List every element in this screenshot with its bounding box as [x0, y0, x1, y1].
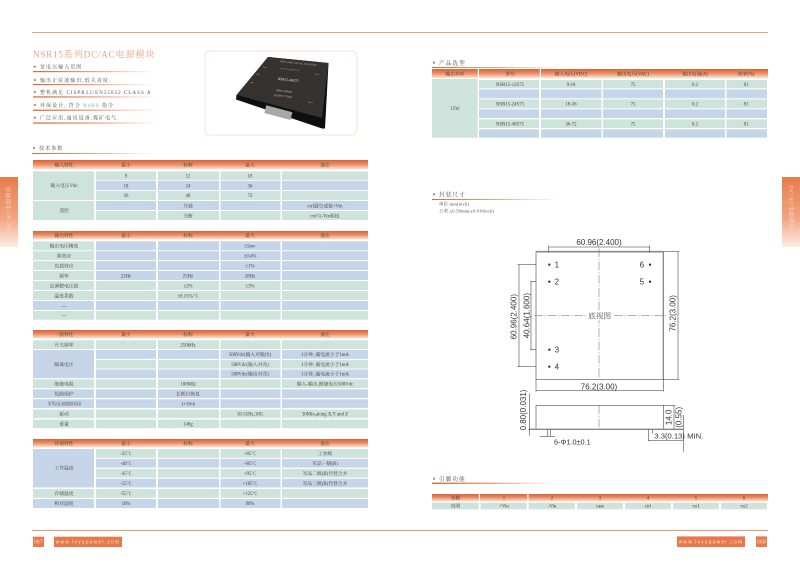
table: input characteristics: 18	[248, 174, 253, 180]
table: environmental characteristics: 军品二级(B)代替合并	[303, 470, 348, 477]
product photo: NSR15-48S75 DC/AC INVERTER	[279, 60, 317, 67]
table: product selection: 15W	[450, 107, 460, 112]
header row: 备注	[320, 232, 330, 239]
footer: left page number	[33, 537, 44, 547]
header row: 标称	[183, 440, 193, 447]
table: general characteristics: 30Min,along X,Y and Z	[302, 413, 348, 418]
footer: left website	[54, 537, 122, 547]
table: general characteristics: 振动	[59, 411, 69, 418]
header row: 最大	[245, 331, 255, 338]
header row: 一般特性	[54, 331, 74, 338]
footer: right page number	[756, 536, 767, 547]
pins: 1	[555, 261, 560, 270]
table: general characteristics: 输入-输出,绝缘电压500Vdc	[297, 380, 353, 388]
table: input characteristics	[33, 160, 368, 220]
pins: 6	[640, 261, 645, 270]
feature: wide input: 宽电压输入范围	[40, 64, 82, 71]
footer: left page number: 067	[34, 540, 43, 546]
side tab: left: DC/AC电源模块	[5, 186, 13, 230]
bottom view outline: 底视图	[588, 311, 611, 321]
table: environmental characteristics: +125℃	[243, 491, 258, 497]
table: general characteristics: 250kHz	[180, 343, 196, 348]
table: pin functions	[432, 494, 768, 510]
table: output characteristics: ±1%	[245, 264, 255, 269]
table: general characteristics: 1分钟, 漏电流小于1mA	[301, 371, 350, 378]
header row: 输入电压(VDC)	[555, 70, 588, 77]
side tab: right	[782, 177, 800, 247]
dimension: bottom width: 76.2(3.00)	[581, 382, 618, 391]
table: output characteristics	[33, 231, 368, 320]
pins: 2	[555, 278, 560, 287]
heading: pin functions: 引脚功能	[439, 475, 466, 483]
description row: -Vin	[548, 505, 557, 510]
table: output characteristics: ±2%	[183, 284, 193, 289]
table: environmental characteristics	[33, 439, 368, 508]
table: general characteristics: 500Vdc(输出对壳)	[231, 371, 269, 378]
dimension: outer pin spacing: 60.96(2.400)	[510, 294, 519, 339]
heading: package dimensions	[432, 190, 560, 200]
heading: technical parameters: 技术参数	[39, 145, 63, 152]
header row: 5	[695, 497, 698, 502]
description row: case	[596, 505, 604, 510]
table: environmental characteristics: -55℃	[120, 481, 132, 487]
pins: 4	[555, 363, 560, 372]
table: environmental characteristics: 相对湿度	[54, 500, 74, 507]
table: environmental characteristics: -55℃	[120, 491, 132, 497]
header row: 输入特性	[54, 162, 74, 168]
description row: vo2	[740, 505, 748, 510]
dimension: height: 76.2(3.00)	[668, 295, 677, 332]
table: product selection: NSR15-12S75	[496, 83, 525, 88]
header row: 标称	[183, 232, 193, 239]
table: output characteristics: ±3%	[245, 284, 255, 289]
heading: pin functions	[432, 475, 554, 484]
header row: 输出电压(VAC)	[617, 70, 649, 77]
header row: 环境特性	[54, 440, 74, 447]
header row	[33, 439, 368, 448]
footer: right page number: 068	[757, 540, 766, 546]
dimension notes: 单位:mm(inch)	[439, 200, 469, 208]
table: output characteristics: 源效应	[57, 252, 71, 260]
table: input characteristics: 24	[186, 184, 191, 189]
header row: 最小	[121, 331, 131, 338]
product photo: +Vin	[262, 67, 267, 69]
dimension: top width: 60.96(2.400)	[576, 238, 622, 247]
table: general characteristics: 短路保护	[54, 390, 74, 398]
product photo: Pin 1	[315, 74, 320, 76]
table: output characteristics: 22Hz	[121, 274, 131, 279]
header row	[432, 69, 768, 78]
table: input characteristics: ctrl悬空或接+Vin	[307, 202, 343, 209]
table: environmental characteristics: 存储温度	[54, 490, 74, 497]
table: general characteristics: 隔离电压	[54, 361, 74, 368]
header row: 1	[503, 497, 506, 502]
table: product selection: NSR15-24S75	[496, 102, 525, 108]
side view: 6-Φ1.0±0.1	[554, 437, 591, 446]
table: output characteristics: —	[61, 304, 67, 309]
table: output characteristics: ±5mv	[244, 245, 256, 250]
table: input characteristics: ctrl与-Vin相连	[310, 212, 340, 219]
side view: 0.80(0.031)	[519, 389, 528, 430]
header row: 最小	[121, 440, 131, 447]
table: product selection: 81	[744, 102, 749, 108]
table: environmental characteristics: +95℃	[244, 471, 256, 477]
table: input characteristics: 36	[124, 194, 129, 199]
table: environmental characteristics: +85℃	[244, 461, 256, 467]
header row: 4	[647, 497, 650, 502]
table: environmental characteristics: 军品三级(B)代替合并	[303, 480, 348, 487]
table: environmental characteristics: -25℃	[120, 451, 132, 457]
table: general characteristics: 长期自恢复	[176, 390, 200, 398]
table: general characteristics: 平均无故障时间	[47, 400, 81, 407]
description row: ctrl	[645, 505, 652, 510]
table: product selection: 36-72	[565, 122, 577, 127]
table: product selection: 75	[631, 122, 636, 127]
header row: 2	[551, 497, 554, 502]
table: input characteristics: 9	[125, 174, 128, 180]
header row: 输出电流(A)	[682, 70, 708, 77]
header row	[33, 330, 368, 338]
table: product selection: NSR15-48S75	[496, 122, 525, 127]
header row	[33, 160, 368, 170]
table: input characteristics: 36	[248, 184, 253, 189]
table: environmental characteristics: -45℃	[120, 471, 132, 477]
side view	[519, 389, 703, 452]
dimension: inner pin spacing: 40.64(1.600)	[522, 293, 531, 338]
dimension: bottom width	[536, 379, 663, 392]
table: general characteristics: 500Vdc(输入对壳)	[231, 361, 269, 368]
feature: EMC: 整机满足 CISPR22/EN55022 CLASS A	[40, 89, 152, 96]
header row: 最小	[121, 232, 131, 239]
table: environmental characteristics: 军品一级(B)	[312, 460, 338, 467]
header row: 输出功率	[445, 70, 465, 77]
header row: 管脚	[451, 495, 460, 502]
dimension notes	[439, 200, 494, 214]
header row: 最大	[245, 232, 255, 239]
table: input characteristics: 12	[186, 174, 191, 180]
header row: 备注	[320, 440, 330, 447]
product photo: www.lvyupower.com	[281, 68, 300, 72]
table: input characteristics: 开通	[183, 202, 193, 209]
product photo	[205, 51, 357, 135]
table: product selection: 81	[744, 122, 749, 127]
description row: 说明	[451, 503, 460, 510]
table: environmental characteristics: 90%	[246, 502, 254, 507]
dimension: top width	[549, 238, 650, 252]
table: general characteristics: 10-55Hz,10G	[237, 413, 264, 418]
pins: 3	[555, 346, 560, 355]
table: product selection: 75	[631, 102, 636, 108]
table: product selection: 75	[631, 83, 636, 88]
table: output characteristics: ±0.15%/℃	[177, 293, 199, 299]
title: NSR15系列DC/AC电源模块	[33, 48, 155, 60]
table: environmental characteristics: 10%	[122, 502, 130, 507]
table: input characteristics: 关断	[183, 212, 193, 219]
heading: package dimensions: 封装尺寸	[439, 190, 466, 198]
pins	[548, 261, 651, 372]
dimension: outer pin spacing	[510, 265, 536, 367]
description row	[432, 503, 767, 510]
product photo: case	[250, 82, 254, 84]
side tab: left	[0, 177, 18, 247]
table: environmental characteristics: -40℃	[120, 461, 132, 467]
heading: product selection: 产品选型	[439, 59, 466, 67]
dimension notes: 公差:±0.50mm(±0.010inch)	[439, 208, 494, 214]
table: output characteristics: ±0.4%	[244, 254, 256, 260]
feature: RoHS: 环保设计, 符合 RoHS 指令	[40, 102, 114, 109]
product photo: OUTPUT 75VAC	[274, 94, 293, 99]
table: product selection: 18-36	[565, 102, 577, 108]
header row: 最大	[245, 440, 255, 447]
table: product selection: 0.2	[692, 102, 699, 108]
table: input characteristics: 18	[124, 184, 129, 189]
header row: 最大	[245, 162, 255, 168]
bottom view outline	[534, 248, 666, 379]
table: input characteristics: 72	[248, 194, 253, 199]
header row: 型号	[505, 70, 515, 77]
side view: (0.55)	[674, 407, 683, 428]
table: product selection: 81	[744, 83, 749, 88]
table: input characteristics: 遥控	[59, 207, 69, 214]
header row: 备注	[320, 331, 330, 338]
table: environmental characteristics: +105℃	[243, 481, 258, 487]
table: general characteristics: 500Vdc(输入对输出)	[229, 351, 272, 358]
package dimension drawing	[510, 238, 703, 452]
footer: left website: www.lvyupower.com	[56, 540, 120, 546]
description row: vo1	[692, 505, 700, 510]
feature list	[33, 64, 160, 124]
table: input characteristics: 输入电压Vdc	[50, 182, 78, 189]
header row: 3	[599, 497, 602, 502]
table: general characteristics: 1×10⁶h	[181, 401, 196, 407]
table: product selection: 0.2	[692, 122, 699, 127]
table: input characteristics: 48	[186, 194, 191, 199]
table: product selection: 0.2	[692, 83, 699, 88]
table: general characteristics: 140g	[183, 423, 193, 428]
product photo: NSR15-48S75	[277, 77, 299, 83]
product photo: Pin 4	[308, 102, 313, 104]
table: output characteristics: 温度系数	[54, 292, 74, 299]
header row	[33, 231, 368, 240]
header row: 标称	[183, 331, 193, 338]
product photo: INPUT 48VDC	[276, 89, 293, 94]
table: environmental characteristics: 工作温度	[54, 464, 74, 472]
feature: applications: 广泛应用,通讯设备,煤矿电气.	[40, 115, 120, 122]
header row: 备注	[320, 162, 330, 168]
footer: right website: www.lvyupower.com	[679, 540, 743, 546]
table: general characteristics: 1分钟, 漏电流小于1mA	[301, 361, 350, 368]
table: output characteristics: —	[61, 314, 67, 319]
description row: +Vin	[499, 505, 509, 510]
table: general characteristics: 重量	[59, 421, 69, 428]
dimension: height	[663, 252, 679, 379]
table: output characteristics: 总调整电压值	[50, 282, 79, 289]
side view: 14.0	[664, 409, 673, 425]
pins: 5	[640, 278, 645, 287]
table: general characteristics: 绝缘电阻	[54, 380, 74, 388]
table: output characteristics: 输出电压精度	[50, 243, 79, 250]
header row: 效率(%)	[738, 70, 755, 77]
header row	[432, 494, 768, 502]
table: output characteristics: 25Hz	[183, 274, 193, 279]
table: environmental characteristics: 工业级	[318, 450, 332, 457]
header row: 输出特性	[54, 232, 74, 239]
table: environmental characteristics: +85℃	[244, 451, 256, 457]
heading: technical parameters	[32, 145, 154, 154]
table: product selection: 9-18	[567, 83, 576, 88]
table: general characteristics: 1分钟, 漏电流小于1mA	[301, 351, 350, 358]
table: output characteristics: 28Hz	[245, 274, 255, 279]
heading: product selection	[432, 59, 562, 68]
table: output characteristics: 频率	[59, 272, 69, 279]
dimension: inner pin spacing	[522, 282, 536, 350]
feature: sine output: 输出正弦波输出,低失真度.	[40, 77, 111, 84]
footer: right website	[677, 536, 745, 547]
table: general characteristics: 100MΩ	[180, 382, 196, 388]
side view: 3.3(0.13) MIN.	[654, 431, 703, 440]
header row: 最小	[121, 162, 131, 168]
table: general characteristics: 开关频率	[54, 341, 74, 348]
header row: 标称	[183, 162, 193, 168]
table: general characteristics	[33, 330, 368, 428]
side tab: right: DC/AC电源模块	[787, 186, 795, 230]
product photo: -Vin	[256, 74, 261, 76]
header row: 6	[743, 497, 746, 502]
table: product selection	[432, 69, 768, 138]
table: output characteristics: 负载效应	[54, 262, 74, 269]
